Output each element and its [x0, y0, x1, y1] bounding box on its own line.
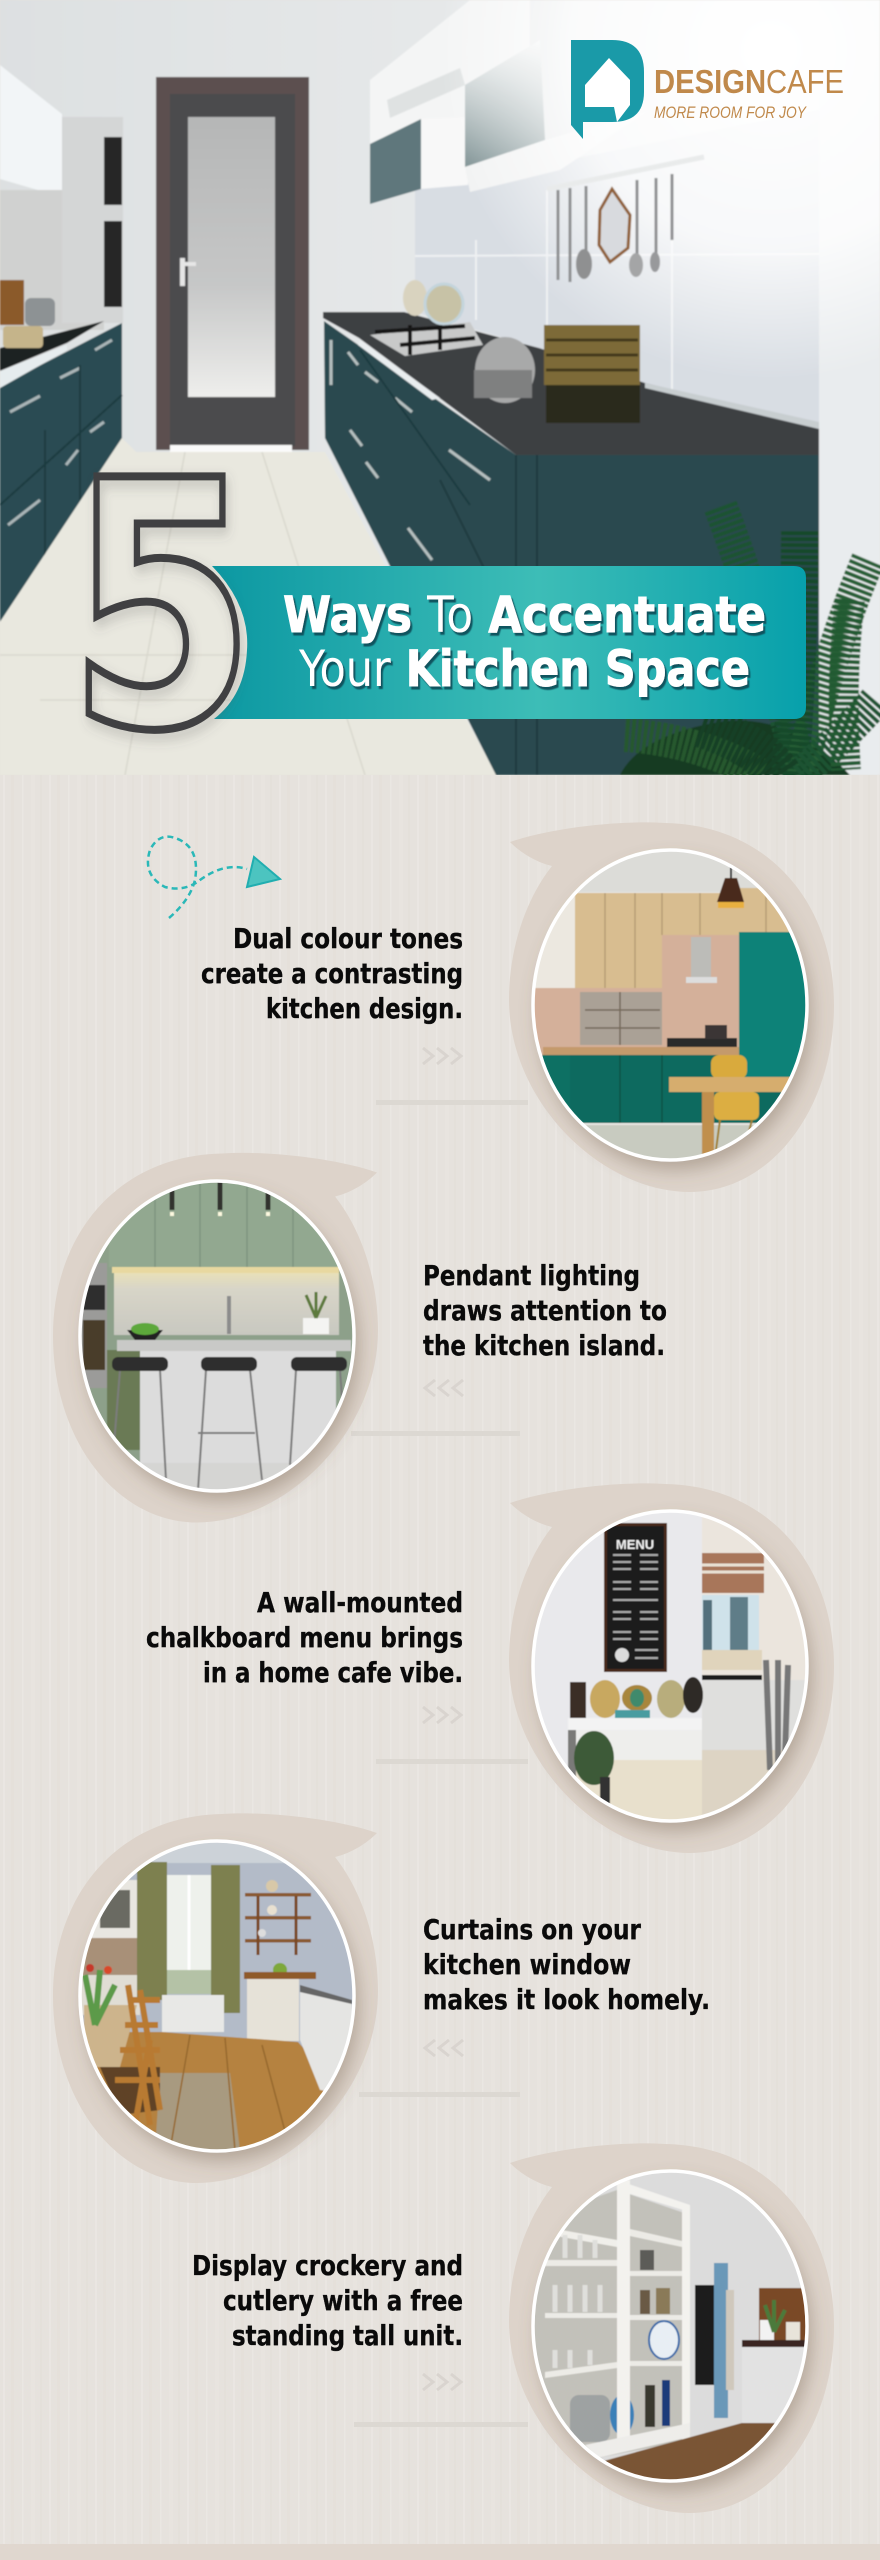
tip text: create a contrasting [201, 957, 463, 990]
tip text: Display crockery and [192, 2249, 463, 2282]
chevrons [423, 2374, 461, 2390]
connector line [351, 1431, 520, 1436]
tip text: standing tall unit. [232, 2319, 463, 2352]
photo ring [80, 1181, 354, 1491]
tip text: Curtains on your [423, 1913, 641, 1946]
title [283, 586, 766, 698]
tip text: draws attention to [423, 1294, 667, 1327]
right counter and base cabinets [323, 312, 819, 775]
panel: tip 3 chalkboard menu [146, 1483, 834, 1853]
door [156, 77, 309, 452]
panel: tip 4 curtains [53, 1813, 710, 2183]
tip text: kitchen window [423, 1948, 631, 1981]
photo ring [533, 1511, 807, 1821]
chevrons [423, 1048, 461, 1064]
top right white haze [466, 0, 880, 343]
tip text: A wall-mounted [257, 1586, 463, 1619]
photo shadow [533, 850, 807, 1160]
photo shadow [533, 2171, 807, 2481]
speech blob [509, 822, 834, 1192]
photo: glass display unit [530, 2168, 810, 2490]
tip text: makes it look homely. [423, 1983, 710, 2016]
tip text: kitchen design. [266, 992, 463, 1025]
panel: tip 1 dual colour tones [201, 822, 834, 1192]
utensil rail [547, 157, 704, 282]
chevrons [425, 1380, 463, 1396]
chevrons [423, 1707, 461, 1723]
connector line [354, 2422, 528, 2427]
tip text [423, 1913, 710, 2016]
speech blob [509, 2143, 834, 2513]
logo wordmark: DESIGNCAFE [654, 63, 844, 100]
tip text: cutlery with a free [223, 2284, 463, 2317]
connector line [376, 1759, 528, 1764]
tip text: in a home cafe vibe. [203, 1656, 463, 1689]
photo shadow [80, 1841, 354, 2151]
photo shadow [80, 1181, 354, 1491]
chevrons [425, 2040, 463, 2056]
panel: tip 5 free standing tall unit [192, 2143, 834, 2513]
panel: tip 2 pendant lighting [53, 1153, 667, 1522]
left counter and cabinets [0, 280, 122, 622]
speech blob [509, 1483, 834, 1853]
photo: kitchen island with stools [78, 1178, 358, 1495]
icon: dashed paper plane [148, 837, 280, 918]
photo ring [533, 2171, 807, 2481]
title line 2: Your Kitchen Space [298, 640, 750, 698]
big outlined number 5: 5 [68, 410, 255, 806]
photo: chalkboard wall [530, 1508, 810, 1825]
logo mark [571, 40, 644, 139]
right tiled wall [415, 174, 820, 422]
title banner [212, 566, 806, 719]
tip text [192, 2249, 463, 2352]
photo ring [533, 850, 807, 1160]
left upper cabinets and tall unit [0, 65, 123, 330]
connector line [359, 2092, 520, 2097]
photo ring [80, 1841, 354, 2151]
logo: Design Cafe [571, 40, 844, 139]
speech blob [53, 1813, 378, 2183]
panel: hero kitchen photo [0, 0, 880, 775]
photo: green and wood kitchen [530, 848, 810, 1165]
tip text: Pendant lighting [423, 1259, 640, 1292]
photo: chalkboard wall: MENU [616, 1537, 654, 1552]
plant [620, 505, 876, 775]
tip text: Dual colour tones [233, 922, 463, 955]
tip text [201, 922, 463, 1025]
title line 1: Ways To Accentuate [283, 586, 766, 644]
tip text: chalkboard menu brings [146, 1621, 463, 1654]
hob, plates, kettle and spice rack [370, 280, 640, 423]
logo tagline: MORE ROOM FOR JOY [654, 103, 807, 122]
connector line [376, 1100, 528, 1105]
tip text: the kitchen island. [423, 1329, 665, 1362]
photo: kitchen with curtains and wood floor [78, 1838, 358, 2160]
tip text [146, 1586, 463, 1689]
speech blob [53, 1153, 378, 1522]
photo shadow [533, 1511, 807, 1821]
tip text [423, 1259, 667, 1362]
floor [0, 438, 496, 775]
right upper cabinets [369, 0, 574, 204]
